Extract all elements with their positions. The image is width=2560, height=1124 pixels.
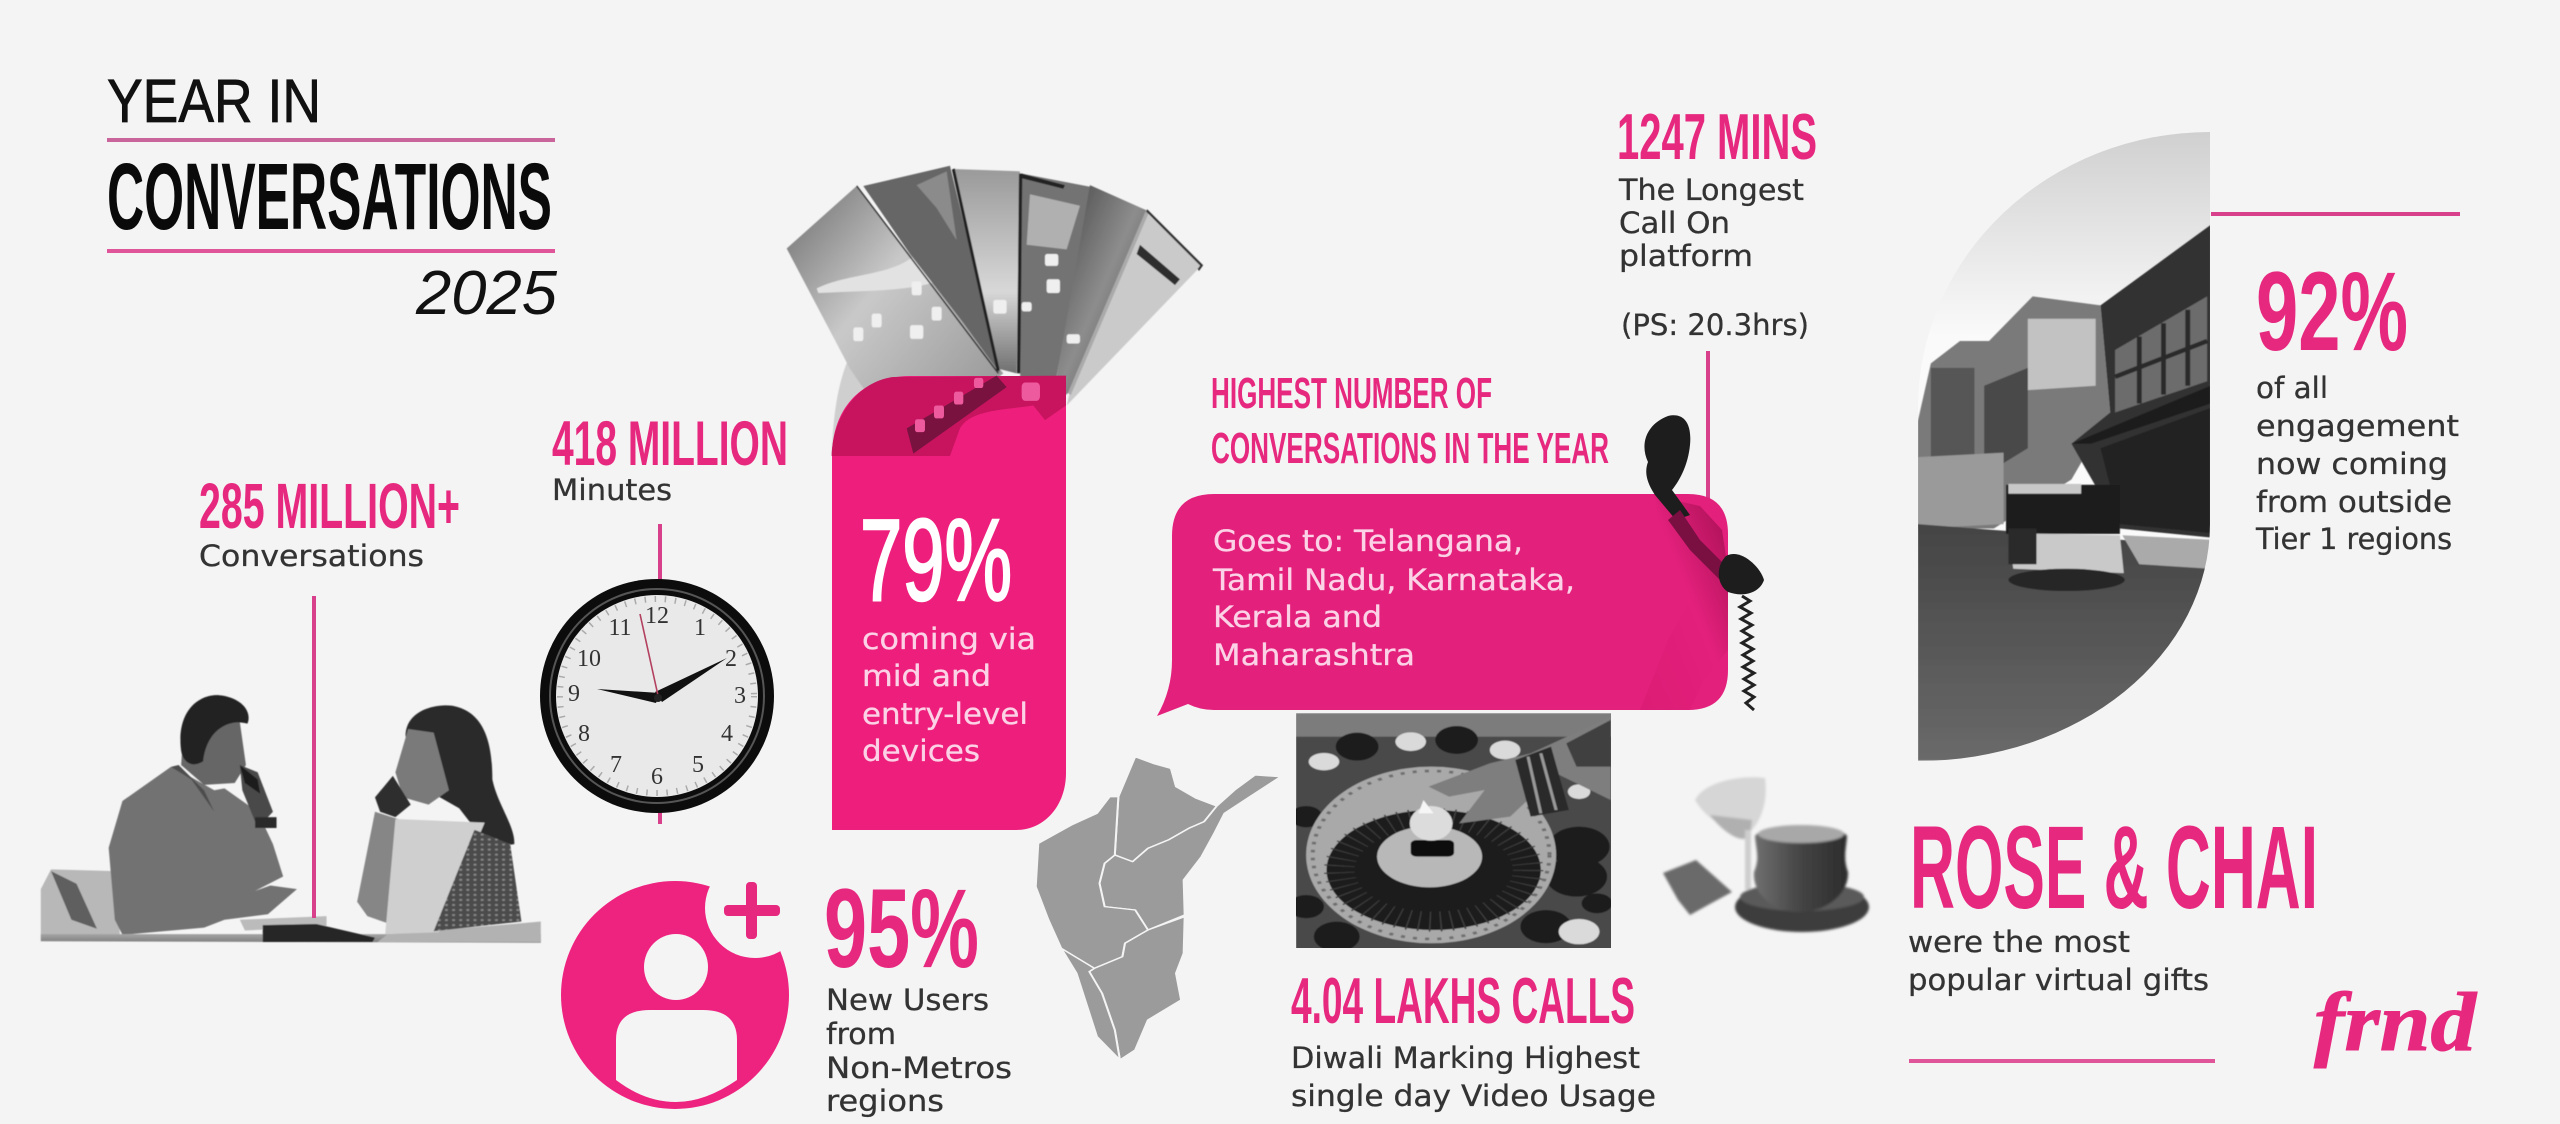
bubble text: Tamil Nadu, Karnataka, — [1212, 563, 1575, 597]
stat: 95 percent new users: New Users — [826, 983, 989, 1017]
stat: 92 percent engagement: now coming — [2256, 447, 2448, 481]
title: conversations: CONVERSATIONS — [107, 144, 552, 250]
clock numerals: 5 — [692, 752, 704, 778]
Kerala — [1061, 948, 1120, 1060]
icon: hand holding telephone — [1640, 415, 1764, 710]
stat: 4.04 lakhs calls: Diwali Marking Highest — [1291, 1041, 1640, 1075]
heading: highest number of conversations: HIGHEST NUMBER OF — [1211, 369, 1492, 418]
stat: 4.04 lakhs calls: 4.04 LAKHS CALLS — [1291, 964, 1635, 1037]
Karnataka — [1036, 797, 1148, 968]
clock numerals — [568, 603, 746, 790]
connector line: clock — [658, 524, 662, 824]
stat: 418 million minutes: 418 MILLION — [552, 409, 788, 479]
stat: 95 percent new users: 95% — [824, 866, 979, 991]
Andhra Pradesh — [1099, 775, 1281, 930]
Telangana — [1115, 757, 1217, 862]
stat: 1247 mins: The Longest — [1618, 173, 1804, 207]
stat: 1247 mins — [1617, 100, 1817, 342]
connector line: conversations — [312, 596, 316, 918]
stat: 92 percent engagement: from outside — [2256, 485, 2452, 519]
stat: 418 million minutes: Minutes — [552, 473, 672, 507]
stat: rose and chai: popular virtual gifts — [1908, 963, 2209, 997]
stat: 95 percent new users: Non-Metros — [826, 1051, 1012, 1085]
connector line: longest call — [1706, 351, 1710, 501]
clock numerals: 1 — [694, 615, 706, 641]
stat: 95 percent new users: regions — [826, 1084, 944, 1118]
panel: 79 percent card — [832, 376, 1066, 830]
clock numerals: 10 — [577, 646, 601, 672]
clock numerals: 7 — [610, 752, 622, 778]
clock numerals: 8 — [578, 721, 590, 747]
photo: fan of phones — [787, 166, 1202, 456]
clock numerals: 3 — [734, 683, 746, 709]
stat: 1247 mins: 1247 MINS — [1617, 100, 1817, 173]
logo: frnd: frnd — [2314, 976, 2478, 1069]
icon: wall clock — [540, 579, 774, 813]
stat: 95 percent new users — [824, 866, 1012, 1118]
stat: rose and chai: were the most — [1908, 925, 2130, 959]
stat: rose and chai — [1908, 802, 2318, 997]
map: south Indian states — [1036, 757, 1281, 1060]
divider: 92 percent — [2211, 212, 2460, 216]
clock numerals: 9 — [568, 681, 580, 707]
Tamil Nadu — [1089, 917, 1185, 1060]
stat: 4.04 lakhs calls — [1291, 964, 1656, 1113]
photo: diwali rangoli — [1288, 713, 1612, 952]
card text: devices — [862, 734, 980, 768]
card text: entry-level — [862, 697, 1028, 731]
title: year in: YEAR IN — [107, 67, 321, 135]
stat: 92 percent engagement: engagement — [2256, 409, 2459, 443]
stat: 1247 mins: Call On — [1619, 206, 1730, 240]
stat: 285 million conversations: Conversations — [199, 539, 424, 573]
title: year: 2025 — [415, 259, 558, 328]
clock numerals: 4 — [721, 721, 733, 747]
stat: 92 percent engagement — [2255, 249, 2459, 556]
stat: 1247 mins: platform — [1619, 239, 1753, 273]
photo: rose and chai — [1663, 777, 1869, 932]
stat: 285 million conversations — [199, 470, 460, 573]
stat: 4.04 lakhs calls: single day Video Usage — [1291, 1079, 1656, 1113]
clock numerals: 6 — [651, 764, 663, 790]
clock numerals: 12 — [645, 603, 669, 629]
photo: couple on phones — [41, 695, 541, 943]
stat: 95 percent new users: from — [826, 1017, 896, 1051]
bubble text: Kerala and — [1213, 600, 1382, 634]
card text: mid and — [862, 659, 991, 693]
photo: street with auto rickshaw — [1918, 132, 2211, 772]
card text — [862, 622, 1036, 768]
title block — [107, 67, 558, 328]
stat: 1247 mins: (PS: 20.3hrs) — [1621, 308, 1809, 342]
heading: highest number of conversations: CONVERSATIONS IN THE YEAR — [1211, 424, 1609, 473]
stat: 92 percent engagement: 92% — [2256, 249, 2408, 374]
card figure: 79% — [860, 495, 1012, 625]
heading: highest number of conversations — [1211, 369, 1609, 473]
bubble text — [1212, 524, 1575, 672]
stat: 285 million conversations: 285 MILLION+ — [199, 470, 460, 542]
bubble text: Goes to: Telangana, — [1213, 524, 1523, 558]
clock numerals: 2 — [725, 646, 737, 672]
icon: add user — [561, 858, 805, 1109]
card text: coming via — [862, 622, 1036, 656]
stat: 92 percent engagement: of all — [2256, 371, 2328, 405]
stat: 418 million minutes — [552, 409, 788, 507]
stat: 92 percent engagement: Tier 1 regions — [2255, 522, 2452, 556]
phones overlay on card — [832, 376, 1066, 456]
speech bubble: top states — [1157, 494, 1728, 716]
clock numerals: 11 — [608, 615, 632, 641]
bubble text: Maharashtra — [1213, 638, 1415, 672]
